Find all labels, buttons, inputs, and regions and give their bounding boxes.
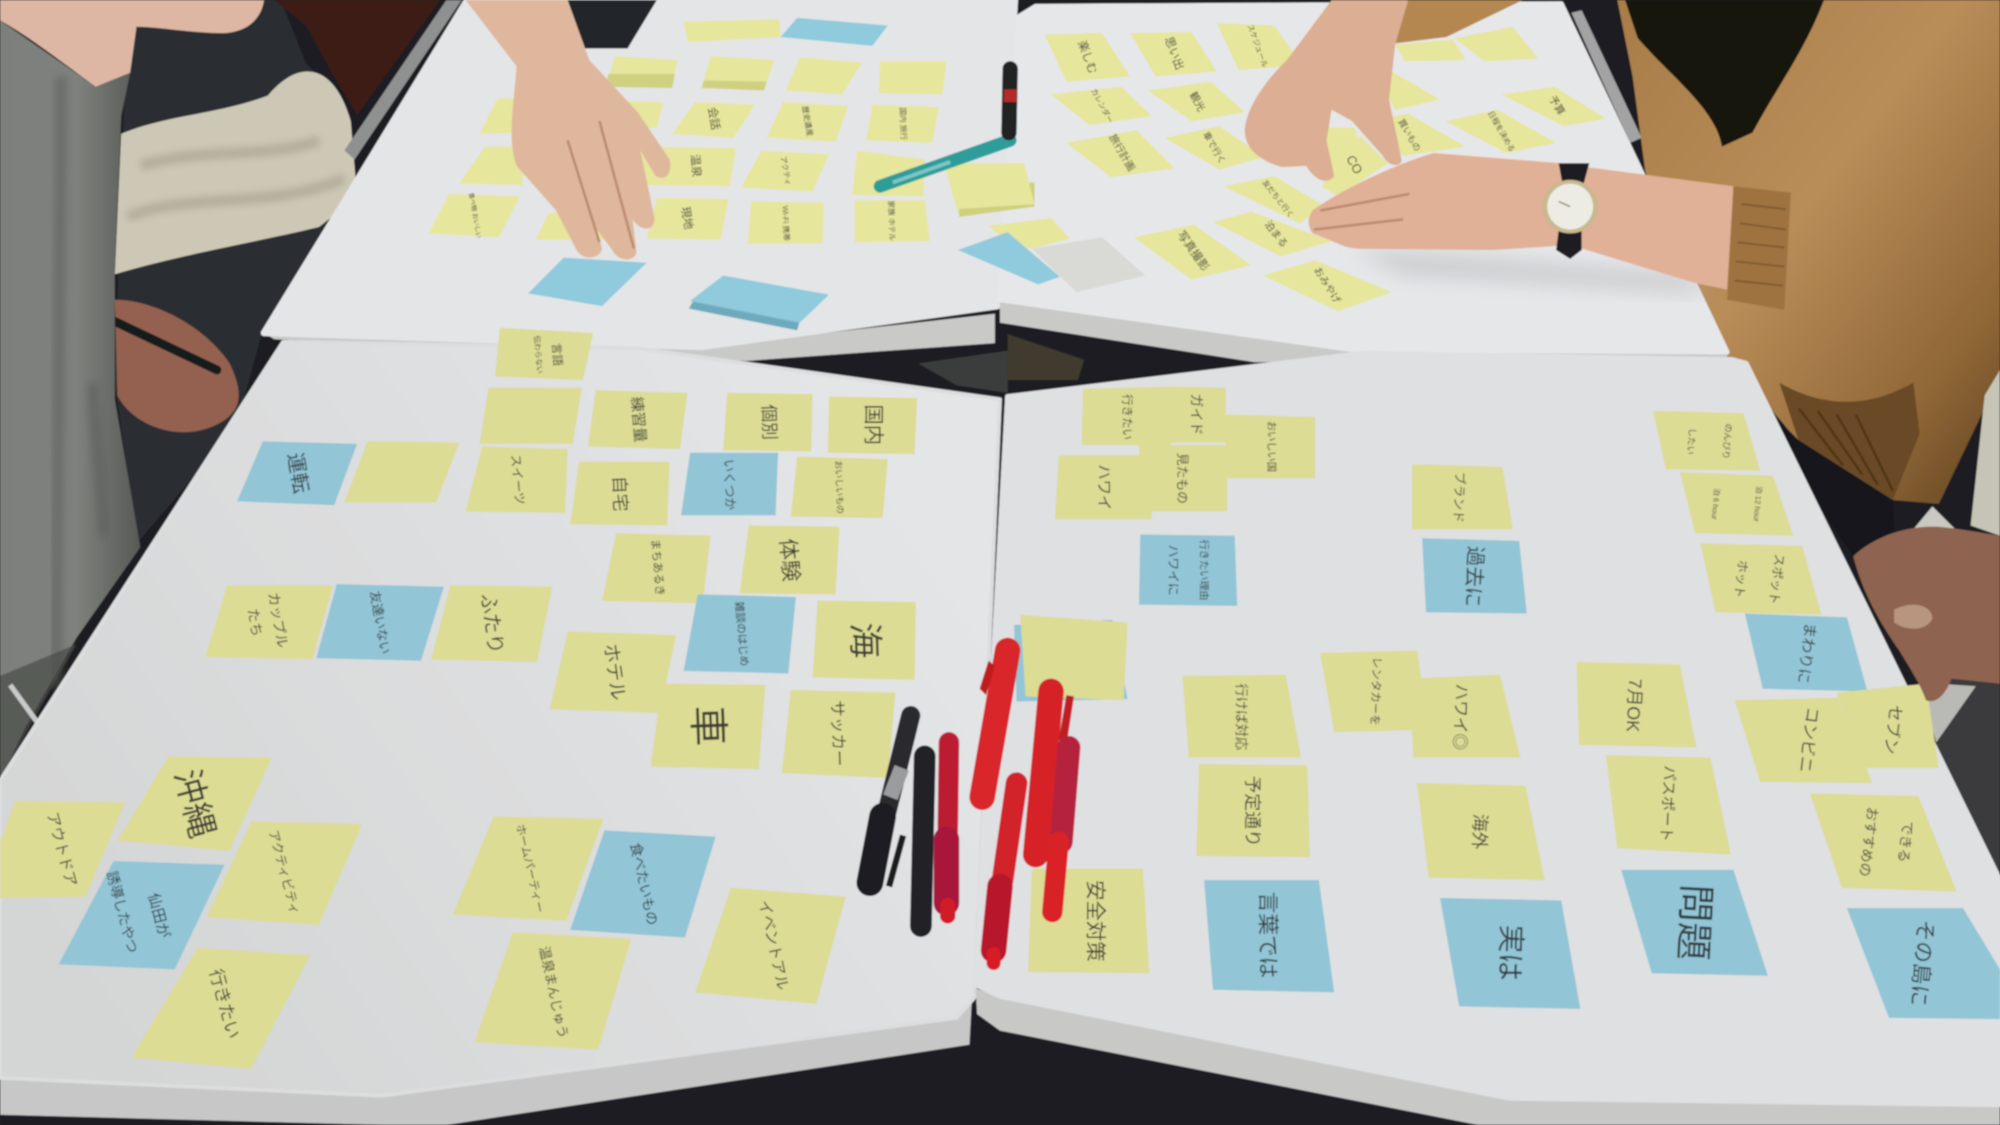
note blue: 仙田が誘導したやつ: 仙田が [144,891,172,940]
note: 予算 [1501,87,1606,126]
note: 国内: 国内 [861,404,884,445]
note curled: CO [1343,153,1366,177]
note: 写真撮影 [1134,224,1251,279]
note blue: いくつか: いくつか [721,459,738,511]
note: サッカー [782,690,895,778]
note: 見たもの [1139,445,1227,511]
note: 6 hour 12 hour: 泊 12 hour [1752,486,1765,523]
note: 現地 [647,198,728,240]
note blue: 食べたいもの [570,830,716,938]
note blue stack [689,276,829,330]
note: コンビニ: コンビニ [1795,706,1822,774]
note: カレンダー: カレンダー [1089,86,1116,125]
crimson gel pen [946,742,949,916]
note blue: 友達いない [316,584,444,661]
note: ホテル [550,631,676,713]
note: 言語: 伝わらない [532,335,545,374]
note: ハワイ: ハワイ [1095,464,1112,510]
note: 行きたい [131,948,310,1069]
note: イベントアル: イベントアル [755,899,791,992]
note: 食べ物: 食べ物 おいしい [467,192,484,239]
note: カレンダー [1051,86,1152,125]
note: 温泉まんじゅう: 温泉まんじゅう [537,945,572,1040]
note blue: 雑談: 雑談のはじめ [732,601,752,667]
note: 旅行計画: 旅行計画 [1106,132,1138,173]
note yellow stack [702,56,774,91]
note: ガイド: ガイド [1188,394,1204,436]
note: 泊まる [1213,212,1332,256]
note: ホットスポット: スポット [1766,553,1787,605]
note yellow behind hand [480,98,663,134]
note: まちあるき: まちあるき [648,538,666,597]
note blue: 言葉では: 言葉では [1255,892,1280,978]
note yellow top [1395,40,1466,61]
note: 家族: 家族 ホテル [886,200,898,241]
note: 旅行計画 [1066,130,1175,177]
note: 沖縄: 沖縄 [167,765,221,842]
note yellow behind hand [459,147,523,185]
note blue: 実は [1440,898,1580,1009]
note blue: まわりに [1745,614,1867,691]
hand: person lower right corner [1853,527,2000,701]
note: 行きたい [1082,386,1171,445]
note: 温泉 [612,147,736,186]
sticky notes: top left table [429,18,946,330]
note: セブン [1837,684,1939,768]
note: 練習量 [588,390,688,449]
note blue tilted [958,232,1060,284]
note: アクティビティ: アクティ [779,155,793,186]
note: コンビニ [1735,698,1872,783]
red marker one [980,651,1008,797]
note: ホテル: ホテル [599,642,628,702]
note: ハワイ◎ [1409,675,1520,758]
note: 安全対策: 安全対策 [1083,880,1106,962]
note: ブランド [1412,464,1513,529]
note blue: 過去に [1422,538,1527,614]
note: ホットスポット [1700,543,1821,615]
note: おすすめの: おすすめの [1856,806,1881,878]
note yellow near pad [989,218,1070,249]
note: 買いもの: 買いもの [1396,117,1423,153]
note: スケジュール [1217,23,1302,70]
crimson marker three [1052,747,1069,912]
cuff upper: tan sleeve [1395,0,1523,43]
note: パスポート [1606,755,1731,855]
note yellow under fingers [536,210,625,240]
note: 国内 [828,397,917,454]
carpet right [1920,670,2000,893]
floor glimpse between tables [1008,334,1084,380]
note blue: 食べたいもの: 食べたいもの [628,841,661,927]
note: 友だち [1223,176,1325,223]
note: 予定通り: 予定通り [1243,776,1263,847]
pale chair right [1913,506,1959,533]
note yellow behind pen [852,151,925,196]
chair bar right [1571,10,1642,143]
note yellow [879,61,946,94]
note: おすすめの [1810,793,1957,892]
note: 携帯 [747,202,824,244]
note blue: 雑談 [684,594,796,673]
person right: tan sweater [1617,0,2000,504]
note: 安全対策 [1028,869,1149,973]
note: 車で行く [1165,126,1264,170]
black marker pen [870,716,911,886]
black gel pen [921,756,925,926]
sleeve cuff right [1727,186,1791,310]
note blue: 友達いない: 友達いない [367,590,393,655]
wristwatch [1542,163,1598,259]
silver pole at left [10,685,37,722]
note: おいしいもの: おいしいもの [833,460,845,514]
black marker [1009,69,1010,133]
note: アウトドア: アウトドア [43,810,79,889]
note blue: 言葉では [1204,880,1334,992]
note: 日程: 日程を決める [1486,109,1517,153]
note: スイーツ: スイーツ [508,454,528,506]
note blue: ハワイに行きたい理由: 行きたい理由 [1197,540,1210,601]
note: ハワイ◎: ハワイ◎ [1450,683,1471,750]
note: おみやげ: おみやげ [1311,265,1343,306]
note yellow top [1454,27,1538,61]
note yellow [684,19,781,42]
note: レンタカーを借りる: レンタカーを [1368,657,1383,726]
note: セブン: セブン [1880,704,1906,756]
note: ハワイ [1055,455,1152,519]
note: 友だち: 友だちと行く [1260,178,1297,220]
note: 7月OK [1577,662,1696,747]
note: ホームパーティー: ホームパーティー [513,823,546,914]
note: アウトドア [0,801,125,898]
note: まちあるき [602,533,710,603]
hand: person top left [466,0,670,259]
note: 7月OK: 7月OK [1623,678,1645,733]
note: 会話: 会話 [705,106,722,131]
note: のんびりしたい: のんびり [1721,423,1734,460]
note: 行けば対応: 行けば対応 [1234,683,1249,750]
note: 家族 [855,200,930,242]
note blue: 仙田が誘導したやつ: 誘導したやつ [104,869,141,955]
note: 6 hour 12 hour: 泊 6 hour [1710,488,1722,520]
note: 日程 [1445,109,1556,153]
note: 個別: 個別 [759,404,780,440]
note: 車 [651,684,765,769]
pens on bottom tables [870,651,1074,963]
red marker two [1036,691,1074,855]
note: 沖縄 [117,756,272,851]
chair bar left [344,0,462,159]
note: 予定通り [1196,764,1310,857]
note: 車: 車 [684,705,732,747]
note: 言語: 言語 [549,343,564,367]
note: 国内 [866,105,939,143]
note: 思い出: 思い出 [1162,35,1186,72]
note: アクティビティ [741,151,829,191]
note: 携帯: Wi-Fi 携帯 [781,205,792,241]
note blue [781,18,888,46]
note: 温泉: 温泉 [688,154,704,178]
note: 自宅 [570,462,670,526]
note: 写真撮影: 写真撮影 [1175,228,1213,274]
note: イベントアル [695,888,846,1004]
note: 楽しむ [1045,33,1130,82]
note: 楽しむ: 楽しむ [1075,39,1099,76]
note: 思い出 [1130,32,1217,77]
note: のんびりしたい [1653,411,1760,471]
note: ホットスポット: ホット [1731,559,1751,599]
note: 歴史遺産: 歴史遺産 [800,105,816,137]
table top right [1000,4,1727,362]
note yellow stack [606,56,677,88]
table top left [264,0,1015,361]
note yellow hidden [1314,128,1365,186]
note: ブランド: ブランド [1451,472,1468,523]
note: スイーツ [466,446,568,513]
note: アクティビティ [207,821,362,925]
note: 言語 [495,328,593,380]
note blue: いくつか [681,453,778,515]
note: おみやげ [1263,260,1392,311]
note blue: その島に [1847,908,2000,1019]
note: おいしい国 [1226,415,1315,478]
note: 行けば対応 [1182,675,1301,758]
note yellow behind hand [1371,71,1440,110]
note: 観光: 観光 [1187,90,1208,114]
note: スケジュール: スケジュール [1246,23,1270,69]
teal pen [880,140,1010,186]
note blue: その島に: その島に [1906,919,1938,1007]
note: 買いもの [1353,114,1466,156]
note blue: 実は: 実は [1494,924,1527,981]
note blue: まわりに: まわりに [1794,622,1818,684]
note blue: 過去に: 過去に [1461,545,1487,608]
note: 6 hour 12 hour [1680,472,1793,536]
note: ふたり [431,585,552,662]
note: 予算: 予算 [1546,93,1568,117]
note: 個別 [723,393,812,452]
person right: long black hair [1625,0,1824,147]
note: 歴史遺産 [767,102,848,142]
arm and hand: person right lower [1309,153,1733,290]
note: レンタカーを借りる [1320,651,1429,732]
note: 体験: 体験 [775,537,804,583]
note: 国内: 国内 旅行 [898,107,909,141]
note: 体験 [740,526,839,594]
note blank [480,388,582,444]
note blue: 問題 [1621,870,1768,976]
shadow of right arm on table [1352,249,1709,293]
dark gap under sweater [1773,415,1894,556]
note: 海外: 海外 [1469,813,1490,850]
note: おすすめの: できる [1895,820,1916,864]
note: カップルたち: カップル [265,591,291,649]
note: 行きたい: 行きたい [1120,394,1133,440]
note: アクティビティ: アクティビティ [266,828,303,916]
note blue [528,258,647,306]
note: のんびりしたい: したい [1685,428,1697,455]
note grey blank [1032,237,1145,292]
sticky notes: bottom right table [1014,386,2000,1019]
note: おいしい国: おいしい国 [1265,421,1277,472]
note blue: ハワイに行きたい理由 [1139,534,1237,606]
note: stacked blank near pens [1014,615,1128,702]
pens on top table [880,69,1010,186]
hand: person right upper [1245,0,1408,181]
note: ホームパーティー [453,816,603,921]
red gel pen four [994,783,1017,963]
note yellow [786,57,862,94]
note: 食べ物 [429,192,520,239]
hand holding pen left [115,300,239,432]
note blue: ハワイに行きたい理由: ハワイに [1166,545,1181,596]
note blue: 運転: 運転 [283,451,313,495]
note: 車で行く: 車で行く [1201,130,1228,166]
note blue: 運転 [237,441,357,505]
seated person left: grey sweater [0,20,140,781]
note: 自宅: 自宅 [609,475,631,512]
note: 温泉まんじゅう [474,932,631,1050]
black notebook on table [568,0,657,48]
seated person left: dark clothing and cream fleece [115,0,440,542]
note: 海外 [1417,783,1545,880]
note: 海: 海 [844,622,885,659]
note: 現地: 現地 [678,206,695,231]
note blank [344,441,459,503]
note: ガイド [1167,386,1226,443]
note: おいしいもの [791,457,888,518]
note: 観光 [1148,82,1245,121]
note: 練習量: 練習量 [627,396,648,443]
sticky notes: bottom left table [0,328,917,1069]
sticky notes: top right table [958,23,1606,311]
note: カップルたち: たち [245,607,265,638]
note curled [1321,135,1388,196]
note: 会話 [672,102,755,138]
note: 海 [812,601,916,680]
note blue: 問題: 問題 [1670,883,1717,962]
note: カップルたち [205,585,333,659]
table bottom right [976,353,2000,1125]
note: 見たもの: 見たもの [1175,453,1190,504]
note blue: 仙田が誘導したやつ [59,861,224,969]
seated person left: neck skin [0,0,264,87]
note: サッカー: サッカー [827,700,849,767]
note: パスポート: パスポート [1657,765,1678,842]
note: 行きたい: 行きたい [206,967,243,1041]
table bottom left [0,342,1000,1125]
note: ふたり: ふたり [476,592,506,656]
note: 泊まる: 泊まる [1262,219,1290,250]
sticky pad yellow stack [944,163,1034,217]
